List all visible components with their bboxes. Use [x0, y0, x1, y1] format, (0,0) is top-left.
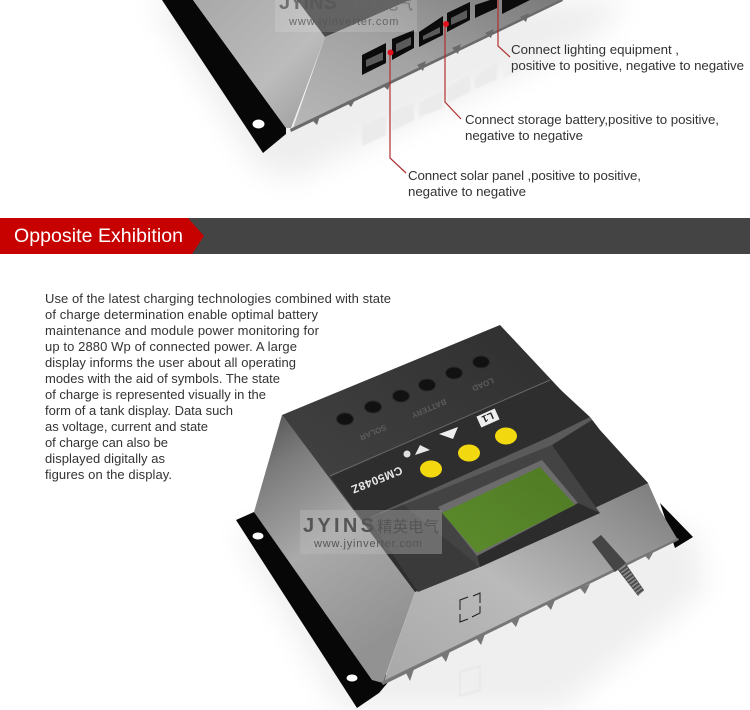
display surround band [368, 417, 592, 518]
description text: as voltage, current and state [45, 419, 208, 434]
section banner: Opposite Exhibition [14, 225, 183, 247]
display bezel [403, 445, 600, 567]
callout: solar panel: negative to negative [408, 184, 526, 199]
square mark [460, 593, 480, 622]
description text: displayed digitally as [45, 451, 166, 466]
callout: lighting equipment: Connect lighting equipment , [511, 42, 679, 57]
callout: storage battery: negative to negative [465, 128, 583, 143]
watermark bottom [300, 510, 442, 554]
faint terminal labels [358, 376, 495, 442]
left sloped face [193, 0, 325, 128]
description text: up to 2880 Wp of connected power. A large [45, 339, 297, 354]
left black flange [236, 512, 390, 708]
mounting hole [252, 120, 264, 128]
model label: CM5048Z [349, 463, 404, 495]
watermark top [275, 0, 417, 32]
terminal knobs [336, 356, 490, 425]
section banner [0, 218, 750, 254]
faint terminal labels: SOLAR [358, 423, 388, 442]
description text: of charge is represented visually in the [45, 387, 266, 402]
description text: figures on the display. [45, 467, 172, 482]
front sloped face [383, 483, 678, 684]
watermark top: www.jyinverter.com [288, 16, 399, 28]
watermark bottom: 精英电气 [377, 518, 439, 536]
dark top panel [297, 0, 410, 37]
bottom edge and teeth [290, 0, 563, 132]
left sloped face [254, 415, 415, 683]
black mounting flange [162, 0, 286, 153]
yellow buttons [420, 428, 517, 478]
description text: modes with the aid of symbols. The state [45, 371, 280, 386]
front sloped face [292, 0, 562, 131]
description text: form of a tank display. Data such [45, 403, 233, 418]
mounting holes [252, 532, 358, 682]
dark top panel [282, 325, 648, 592]
watermark bottom: JYINS [303, 515, 374, 537]
button icons: L1 [479, 409, 495, 424]
lower left panel wedge [368, 505, 480, 592]
description text: of charge can also be [45, 435, 168, 450]
strip below display [477, 503, 600, 567]
description text: maintenance and module power monitoring for [45, 323, 320, 338]
callout: lighting equipment: positive to positive, negative to negative [511, 58, 744, 73]
faint terminal labels: LOAD [471, 376, 495, 393]
cable gland [592, 535, 644, 596]
top controller photo [150, 0, 630, 180]
callout: solar panel [388, 50, 641, 199]
description text: display informs the user about all operating [45, 355, 296, 370]
watermark bottom: www.jyinverter.com [313, 538, 423, 550]
terminal ports [362, 0, 530, 75]
reflection of square mark [460, 666, 480, 696]
callout: solar panel: Connect solar panel ,positive to positive, [408, 168, 641, 183]
callout: lighting equipment [498, 0, 744, 73]
faint terminal labels: BATTERY [410, 397, 448, 420]
right black flange [660, 503, 693, 548]
LCD screen [438, 460, 578, 556]
bottom edge and teeth [381, 538, 679, 685]
description text [45, 291, 391, 482]
callout: storage battery: Connect storage battery,positive to positive, [465, 112, 719, 127]
bottom controller photo [235, 325, 705, 710]
description text: Use of the latest charging technologies combined with state [45, 291, 391, 306]
button icons [404, 408, 500, 458]
callout: storage battery [443, 21, 719, 143]
panel divider line [330, 380, 550, 476]
description text: of charge determination enable optimal battery [45, 307, 318, 322]
banner red arrow [0, 218, 204, 254]
